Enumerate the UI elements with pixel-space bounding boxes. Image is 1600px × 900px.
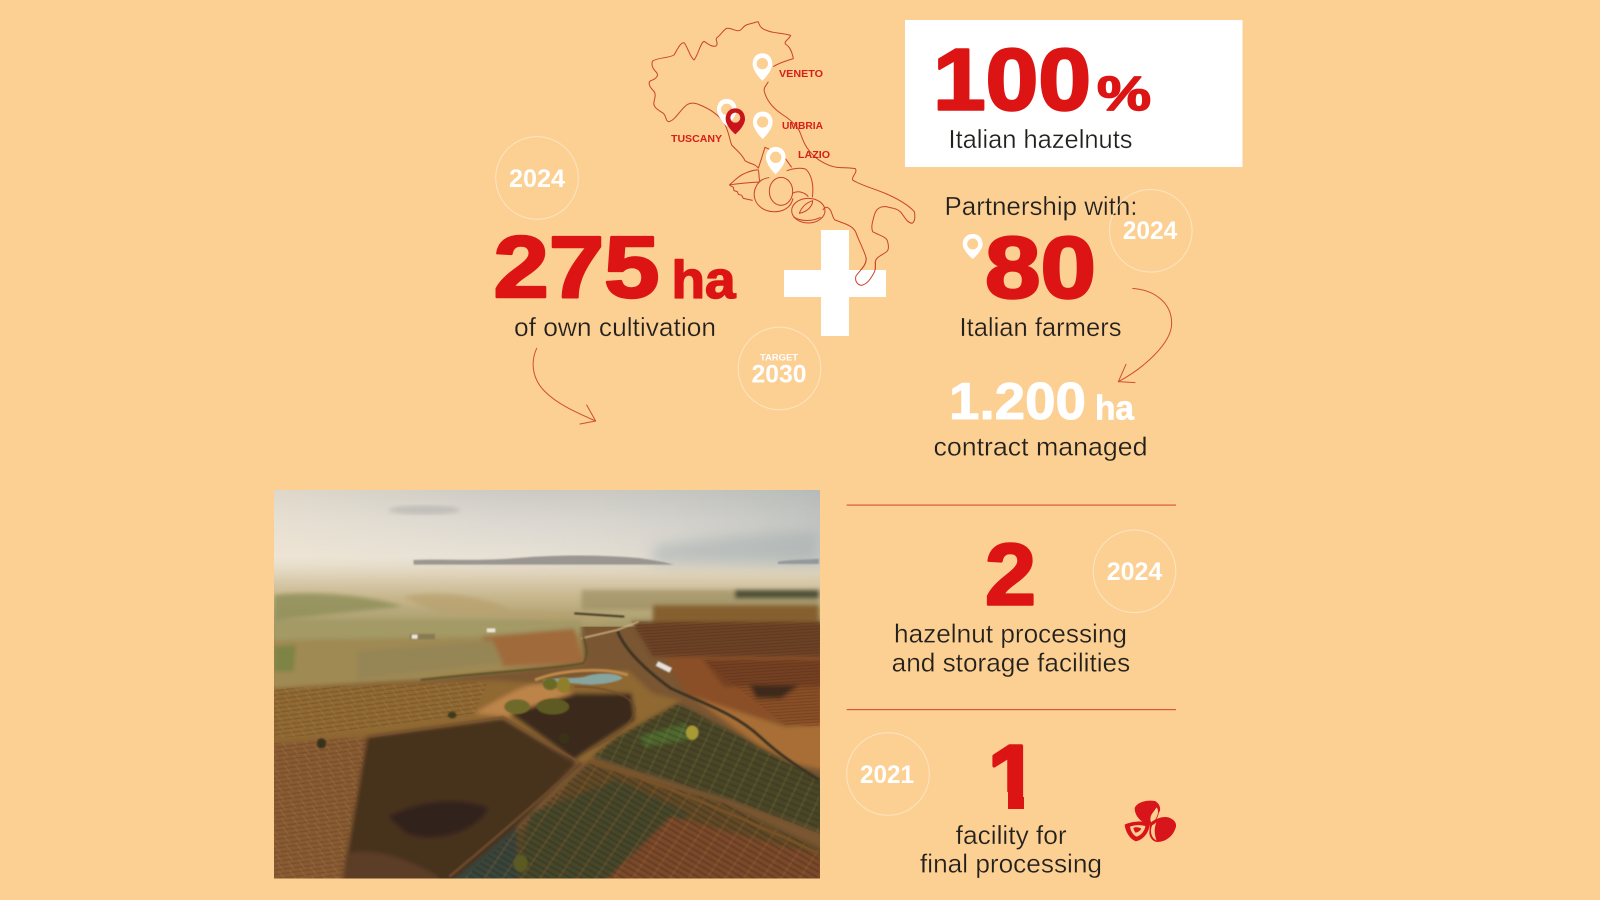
divider line bottom — [847, 709, 1176, 710]
pin: Umbria — [753, 112, 773, 139]
arrow: cultivation to photo — [533, 348, 596, 424]
badge: 2024 partnership — [1110, 190, 1192, 272]
badge: 2024 facilities: 2024 — [1107, 558, 1162, 586]
stat: 275 ha of own cultivation — [494, 219, 736, 342]
field rows — [274, 622, 819, 878]
Italy southern tip over plus — [856, 257, 875, 285]
badge: 2021 — [847, 733, 929, 815]
stat: 2 processing facilities: hazelnut processing — [894, 618, 1127, 648]
Italy outline — [649, 22, 915, 285]
stat: 100: 100 — [933, 32, 1091, 128]
text: partnership with: Partnership with: — [944, 191, 1138, 221]
badge: 2024 facilities — [1093, 530, 1176, 613]
stat: 275 ha of own cultivation: ha — [672, 251, 736, 310]
stat: 1 final processing facility: 1 — [988, 728, 1038, 828]
icon: three hazelnuts — [1125, 801, 1176, 842]
badge: 2024 partnership: 2024 — [1123, 217, 1177, 245]
pin: Lazio — [766, 147, 786, 174]
trees and buildings — [317, 628, 699, 872]
label: Tuscany: TUSCANY — [671, 133, 722, 145]
panel: 100% Italian hazelnuts — [905, 20, 1242, 167]
stat: 1 final processing facility: facility for — [956, 820, 1067, 850]
label: Veneto: VENETO — [779, 68, 823, 80]
icon: plus sign — [784, 230, 886, 336]
pin: Tuscany white — [717, 99, 737, 126]
photo: aerial view of hazelnut fields — [274, 490, 820, 878]
icon: farmer pin — [963, 234, 983, 259]
divider line top — [847, 504, 1176, 506]
stat: percent: % — [1097, 68, 1151, 121]
badge: target 2030: TARGET — [760, 352, 798, 364]
stat: 80 Italian farmers: 80 — [985, 220, 1096, 316]
tracks and details — [367, 613, 819, 877]
stat: 1.200 ha contract managed — [934, 373, 1148, 462]
stat: 1 final processing facility — [920, 744, 1100, 878]
stat: 80 Italian farmers — [960, 220, 1122, 342]
map of Italy with region pins — [649, 22, 915, 285]
badge: target 2030: 2030 — [752, 360, 806, 388]
stat: 1 final processing facility: final processing — [920, 849, 1102, 879]
stat: 275 ha of own cultivation: of own cultivation — [514, 312, 716, 342]
arrow: farmers to contract — [1118, 288, 1172, 383]
stat: 1.200 ha contract managed: 1.200 — [949, 373, 1086, 431]
badge: target 2030 — [738, 327, 821, 410]
caption: Italian hazelnuts: Italian hazelnuts — [948, 124, 1132, 154]
label: Lazio: LAZIO — [798, 149, 830, 161]
pin: Veneto — [753, 53, 772, 81]
stat: 2 processing facilities: 2 — [985, 526, 1036, 624]
hazelnut illustration — [729, 168, 825, 223]
stat: 2 processing facilities — [892, 526, 1130, 678]
label: Umbria: UMBRIA — [782, 120, 823, 132]
pin: Tuscany red — [726, 108, 745, 134]
badge: 2024 own cultivation: 2024 — [509, 165, 565, 193]
stat: 2 processing facilities: and storage facilities — [892, 648, 1130, 678]
stat: 1.200 ha contract managed: contract managed — [934, 432, 1148, 462]
stat: 275 ha of own cultivation: 275 — [494, 219, 660, 316]
badge: 2021: 2021 — [860, 761, 914, 789]
stat: 1.200 ha contract managed: ha — [1095, 390, 1135, 428]
pond — [542, 674, 622, 685]
badge: 2024 own cultivation — [496, 137, 578, 219]
stat: 80 Italian farmers: Italian farmers — [960, 312, 1122, 342]
